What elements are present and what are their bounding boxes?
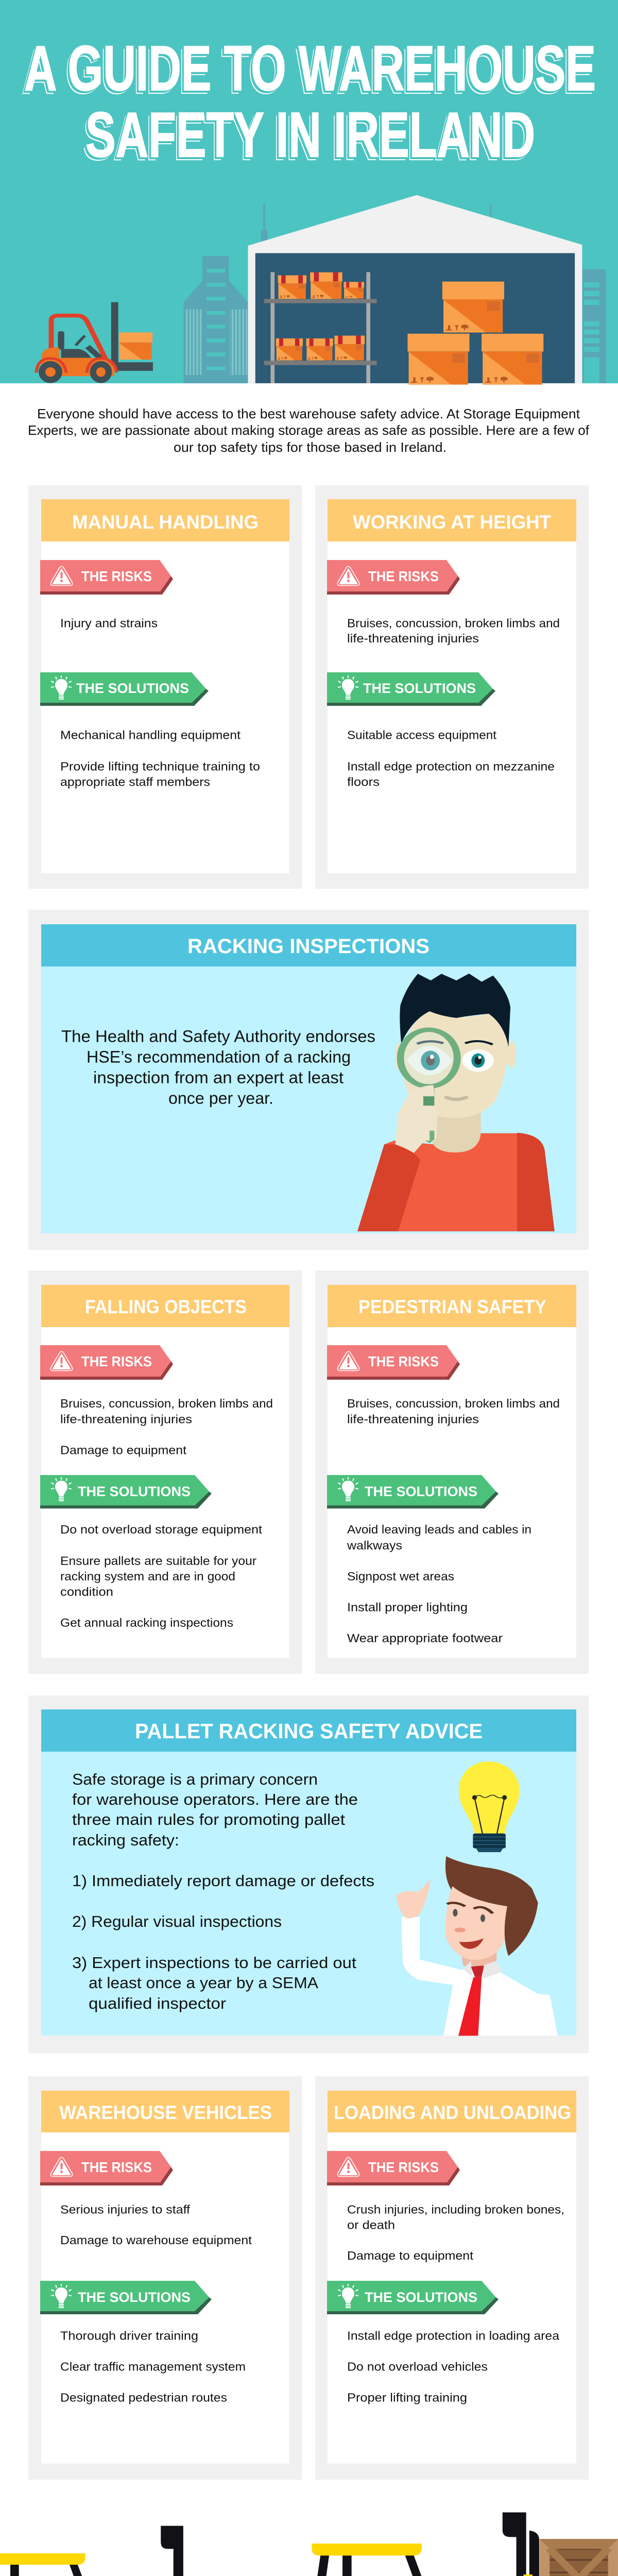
pallet racking text: for warehouse operators. Here are the [72,1790,358,1808]
pallet racking text: three main rules for promoting pallet [72,1810,345,1828]
illustration: man with magnifying glass [357,974,555,1231]
warehouse building [248,195,582,383]
risks text: Injury and strains [60,616,158,630]
risks text: Damage to equipment [347,2249,474,2262]
risks text: Bruises, concussion, broken limbs and [347,616,560,630]
risks ribbon [327,1345,460,1380]
solutions text: Do not overload vehicles [347,2360,488,2373]
stacked boxes [407,282,543,385]
solutions text: Install edge protection on mezzanine [347,759,555,773]
panel: manual handling [28,485,302,889]
risks text [60,2203,252,2247]
solutions text [347,728,555,788]
forklift with lowered crate [0,2526,183,2576]
shelving rack with boxes [264,272,377,383]
risks ribbon [327,560,460,595]
racking inspections text: inspection from an expert at least [93,1069,344,1087]
solutions text: Thorough driver training [60,2329,198,2342]
warehouse illustration [183,195,606,385]
solutions text: Proper lifting training [347,2391,467,2404]
solutions ribbon [327,672,495,706]
solutions ribbon: THE SOLUTIONS [78,2290,191,2305]
solutions text: Designated pedestrian routes [60,2391,227,2404]
heading: working at height: WORKING AT HEIGHT [353,512,551,533]
heading: warehouse vehicles: WAREHOUSE VEHICLES [59,2102,272,2123]
yellow forklifts [0,2513,618,2576]
panel: loading and unloading [315,2076,589,2480]
solutions text: Get annual racking inspections [60,1616,233,1629]
solutions ribbon [40,1475,212,1509]
illustration: man pointing upward [396,1856,558,2036]
solutions text [60,1523,263,1629]
risks text [60,1397,273,1457]
pallet racking text: 2) Regular visual inspections [72,1912,282,1930]
pallet racking text: racking safety: [72,1831,179,1849]
risks text: Bruises, concussion, broken limbs and [347,1397,560,1410]
panel: pedestrian safety [315,1270,589,1674]
solutions text: condition [60,1585,113,1598]
risks ribbon: THE RISKS [81,2159,152,2175]
icon: light bulb [459,1761,520,1852]
solutions text: walkways [347,1538,402,1552]
panel: falling objects [28,1270,302,1674]
solutions text: Install edge protection in loading area [347,2329,559,2342]
risks text: Crush injuries, including broken bones, [347,2203,564,2216]
heading: racking inspections: RACKING INSPECTIONS [187,935,430,958]
pallet racking text [72,1770,374,2012]
solutions text: Mechanical handling equipment [60,728,241,742]
orange forklift [36,302,153,383]
risks text: Serious injuries to staff [60,2203,191,2216]
risks ribbon [40,2151,173,2185]
intro text: Experts, we are passionate about making storage areas as safe as possible. Here are a few of [28,422,590,438]
risks text: Bruises, concussion, broken limbs and [60,1397,273,1410]
pallet racking text: 3) Expert inspections to be carried out [72,1954,356,1972]
forklift with raised crate [295,2513,618,2576]
solutions ribbon: THE SOLUTIONS [365,1484,477,1499]
background city buildings [183,205,606,383]
pallet racking text: qualified inspector [89,1994,226,2012]
pallet racking text: 1) Immediately report damage or defects [72,1872,374,1890]
risks text [347,2203,564,2262]
risks ribbon: THE RISKS [368,1353,439,1369]
solutions ribbon: THE SOLUTIONS [78,1484,191,1499]
risks text: Damage to equipment [60,1444,187,1457]
solutions ribbon: THE SOLUTIONS [363,681,476,696]
solutions text [60,2329,246,2404]
header background [0,0,618,383]
solutions text: Do not overload storage equipment [60,1523,263,1536]
solutions ribbon [40,672,209,706]
heading: falling objects: FALLING OBJECTS [85,1296,247,1317]
risks text: life-threatening injuries [347,1413,479,1426]
intro text: Everyone should have access to the best warehouse safety advice. At Storage Equipment [37,406,580,421]
risks ribbon: THE RISKS [81,568,152,584]
heading: pallet racking safety advice: PALLET RACKING SAFETY ADVICE [135,1719,483,1743]
solutions ribbon: THE SOLUTIONS [76,681,189,696]
solutions text: Provide lifting technique training to [60,759,260,773]
risks text [347,616,560,645]
pallet racking text: Safe storage is a primary concern [72,1770,318,1788]
risks text: life-threatening injuries [347,632,479,645]
solutions text: appropriate staff members [60,775,210,788]
solutions text [347,1523,531,1645]
solutions text: racking system and are in good [60,1569,235,1583]
risks text [347,1397,560,1426]
solutions text [347,2329,559,2404]
risks ribbon: THE RISKS [81,1353,152,1369]
solutions text: Avoid leaving leads and cables in [347,1523,531,1536]
solutions text: Signpost wet areas [347,1569,454,1583]
racking inspections text [61,1027,375,1108]
panel: pallet racking safety advice [28,1696,589,2053]
solutions text: Wear appropriate footwear [347,1631,503,1645]
solutions ribbon [40,2281,212,2314]
risks text: Damage to warehouse equipment [60,2233,252,2247]
solutions text: Install proper lighting [347,1600,468,1614]
risks text: life-threatening injuries [60,1413,192,1426]
heading: pedestrian safety: PEDESTRIAN SAFETY [358,1296,546,1317]
risks ribbon [40,1345,173,1380]
racking inspections text: The Health and Safety Authority endorses [61,1027,375,1046]
solutions text [60,728,260,788]
solutions ribbon [327,2281,499,2314]
intro text: our top safety tips for those based in Ireland. [174,439,447,455]
panel: racking inspections [28,910,589,1250]
risks ribbon: THE RISKS [368,2159,439,2175]
heading: loading and unloading: LOADING AND UNLOADING [334,2102,571,2123]
risks ribbon [40,560,173,595]
racking inspections text: once per year. [168,1089,273,1108]
risks ribbon [327,2151,460,2185]
racking inspections text: HSE’s recommendation of a racking [87,1048,351,1066]
solutions text: Clear traffic management system [60,2360,246,2373]
title [24,33,596,171]
panel: warehouse vehicles [28,2076,302,2480]
panel: working at height [315,485,589,889]
intro text [28,406,590,455]
risks ribbon: THE RISKS [368,568,439,584]
solutions text: Suitable access equipment [347,728,497,742]
solutions ribbon: THE SOLUTIONS [365,2290,477,2305]
solutions ribbon [327,1475,499,1509]
solutions text: Ensure pallets are suitable for your [60,1554,256,1567]
heading: manual handling: MANUAL HANDLING [72,512,259,533]
solutions text: floors [347,775,380,788]
warehouse interior [255,253,575,383]
pallet racking text: at least once a year by a SEMA [89,1974,318,1992]
risks text: or death [347,2218,395,2232]
